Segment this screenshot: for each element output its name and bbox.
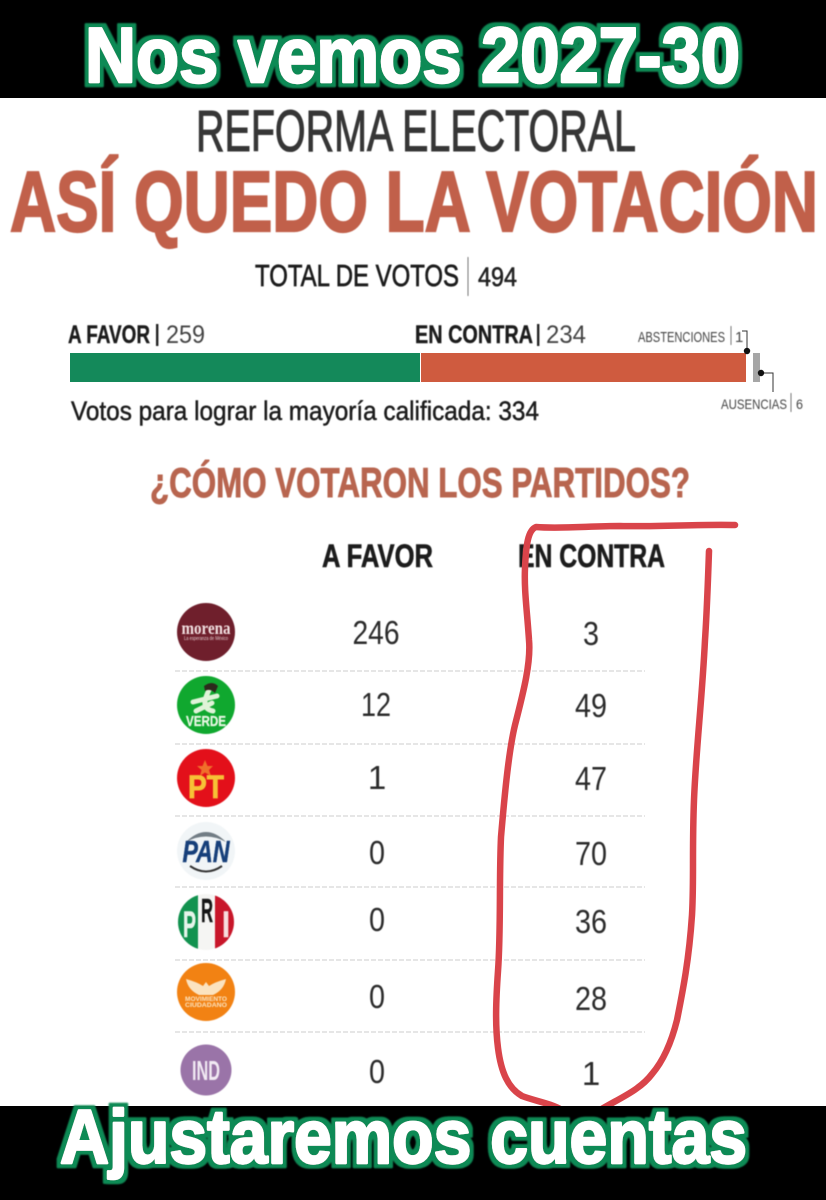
vote bar labels bbox=[68, 321, 743, 349]
icon: PRI logo: P bbox=[183, 904, 196, 945]
table values: en contra: 36 bbox=[575, 903, 607, 940]
icon: PAN logo bbox=[177, 822, 235, 880]
icon: PAN logo: PAN bbox=[182, 834, 230, 869]
table column headers: EN CONTRA bbox=[518, 538, 665, 574]
abstentions connector bbox=[742, 331, 750, 354]
table values: en contra: 28 bbox=[575, 980, 607, 1017]
table values: a favor: 12 bbox=[361, 686, 391, 723]
icon: PT logo: PT bbox=[188, 769, 224, 805]
vote bar labels: 1 bbox=[735, 329, 743, 346]
table values: en contra: 70 bbox=[575, 835, 607, 872]
icon: PRI logo: R bbox=[201, 892, 213, 929]
top banner: Nos vemos 2027-30 bbox=[85, 11, 740, 99]
table column headers: A FAVOR bbox=[322, 538, 433, 574]
icon: verde logo bbox=[177, 676, 235, 734]
table values: en contra bbox=[575, 615, 607, 1092]
table values: a favor: 1 bbox=[368, 759, 386, 796]
heading: reforma electoral: REFORMA ELECTORAL bbox=[196, 99, 636, 164]
vote bar labels: EN CONTRA bbox=[415, 321, 533, 349]
table column headers bbox=[322, 538, 665, 574]
absences connector bbox=[758, 370, 773, 392]
total votes: TOTAL DE VOTOS bbox=[255, 258, 459, 293]
table values: a favor: 0 bbox=[369, 978, 385, 1015]
table values: a favor: 0 bbox=[369, 834, 385, 871]
table values: en contra: 1 bbox=[582, 1055, 600, 1092]
icon: verde logo: VERDE bbox=[186, 713, 226, 730]
icon: PT logo bbox=[177, 749, 235, 807]
absences label: AUSENCIAS bbox=[721, 396, 787, 412]
table values: en contra: 49 bbox=[575, 687, 607, 724]
table values: a favor: 0 bbox=[369, 1053, 385, 1090]
absences label: 6 bbox=[796, 396, 803, 412]
icon: independent badge bbox=[180, 1044, 232, 1096]
icon: morena logo bbox=[177, 603, 235, 661]
qualified majority note: Votos para lograr la mayoría calificada: 334 bbox=[71, 396, 539, 426]
bottom banner: Ajustaremos cuentas bbox=[60, 1095, 747, 1180]
icon: morena logo: morena bbox=[182, 618, 230, 638]
table values: en contra: 3 bbox=[583, 615, 599, 652]
table values: a favor: 0 bbox=[369, 901, 385, 938]
table values: a favor bbox=[352, 614, 400, 1090]
icon: morena logo: La esperanza de México bbox=[184, 636, 228, 642]
icon: movimiento ciudadano logo: CIUDADANO bbox=[185, 1003, 227, 1009]
icon: PRI logo: I bbox=[222, 904, 230, 945]
icon: PRI logo bbox=[178, 892, 234, 950]
hand-drawn red loop around en contra column bbox=[496, 525, 735, 1110]
icon: movimiento ciudadano logo bbox=[177, 963, 235, 1021]
table values: a favor: 246 bbox=[352, 614, 400, 651]
icon: movimiento ciudadano logo: MOVIMIENTO bbox=[185, 997, 227, 1003]
vote bar labels: 259 bbox=[166, 321, 205, 349]
vote bar labels: ABSTENCIONES bbox=[638, 329, 725, 346]
table values: en contra: 47 bbox=[575, 760, 607, 797]
icon: independent badge: IND bbox=[192, 1055, 220, 1086]
vote bar labels: A FAVOR bbox=[68, 321, 150, 349]
vote bar labels: 234 bbox=[546, 321, 586, 349]
stacked vote bar bbox=[70, 353, 760, 382]
total votes: 494 bbox=[478, 262, 517, 292]
